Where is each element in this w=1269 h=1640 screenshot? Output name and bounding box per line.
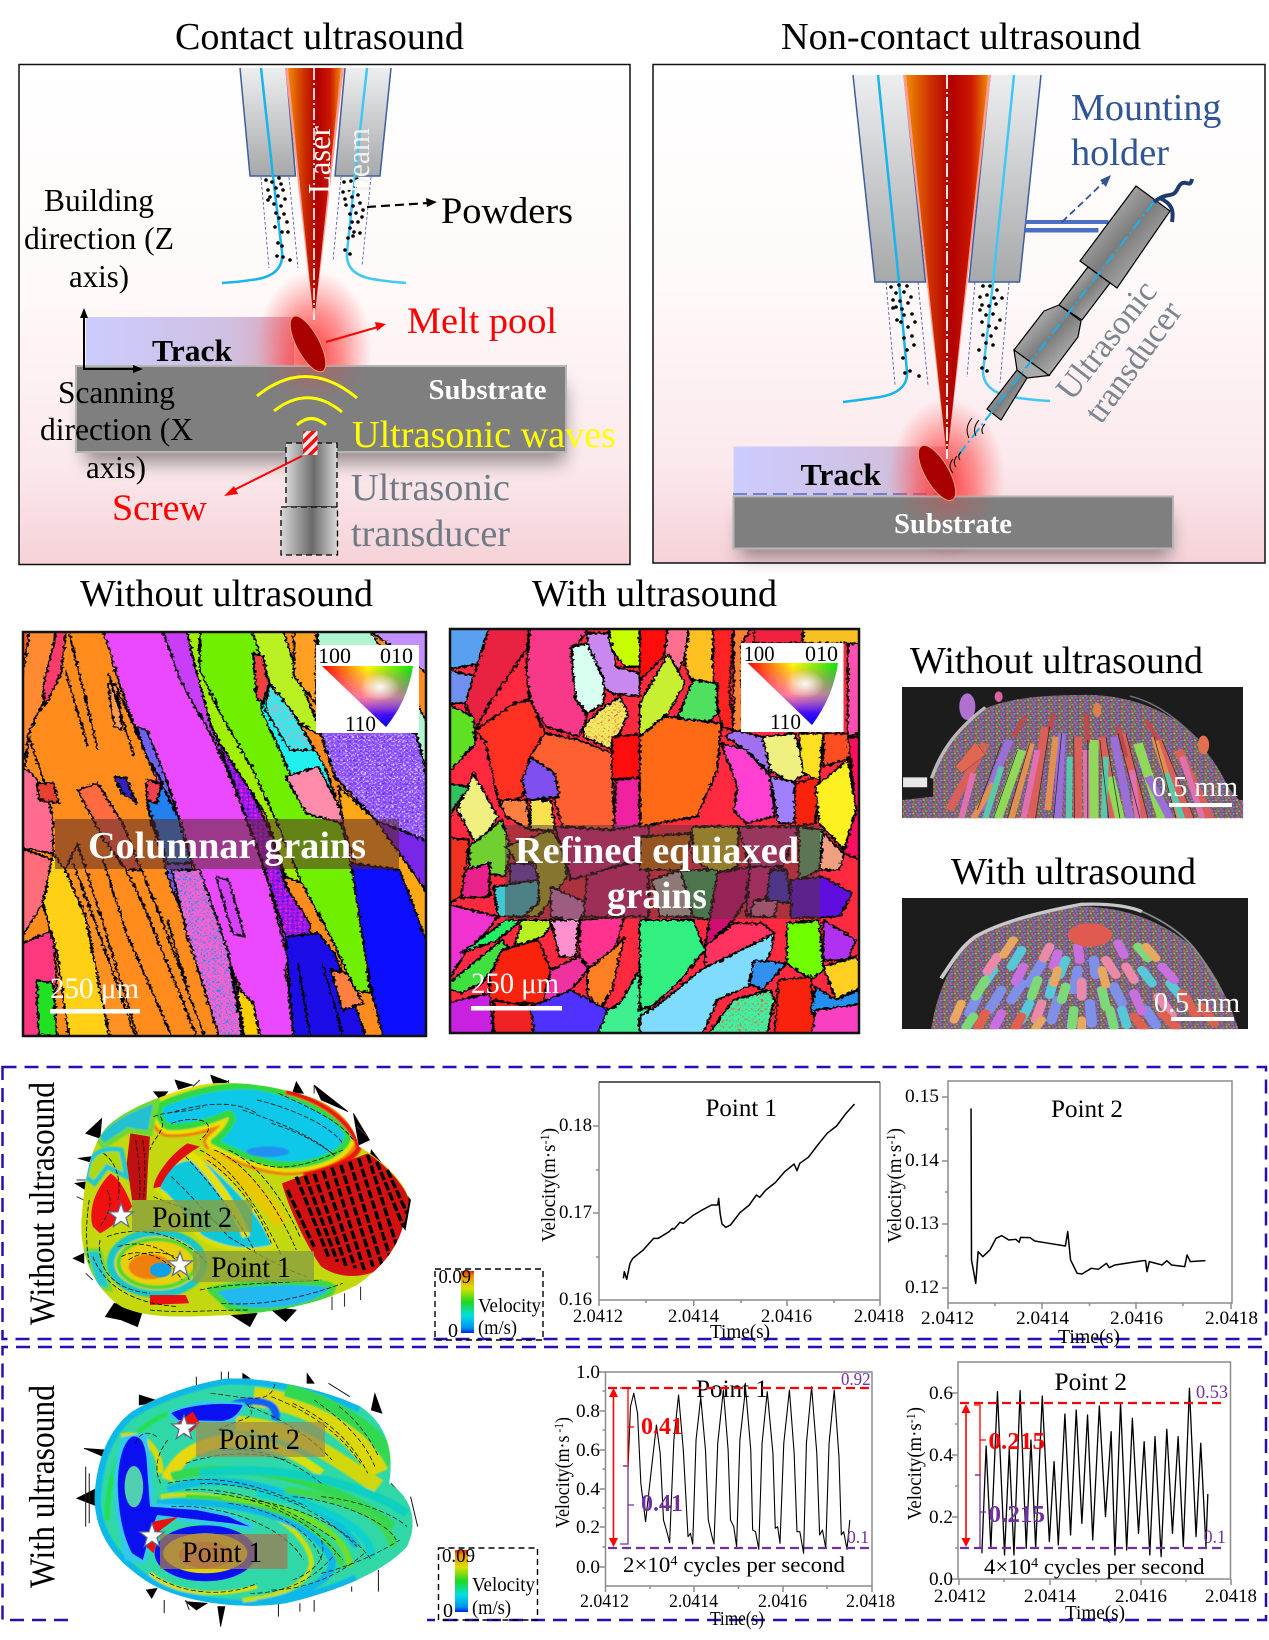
melt pool	[283, 311, 333, 377]
row label: Without ultrasound	[22, 1082, 62, 1325]
nozzle left	[853, 75, 926, 282]
melt pool	[911, 440, 963, 506]
point 1 label	[160, 1534, 288, 1569]
chart: point 1 velocity without ultrasound: 0.17	[559, 1202, 592, 1223]
panel: non-contact ultrasound schematic	[653, 64, 1265, 563]
ultrasonic transducer rotated label: transducer	[1078, 294, 1190, 430]
laser glow	[256, 270, 372, 426]
powders label and arrow: Powders	[441, 191, 573, 232]
heading: without ultrasound (EBSD): Without ultrasound	[80, 573, 373, 615]
building direction label: direction (Z	[24, 220, 174, 256]
velocity colour legend: (m/s)	[478, 1317, 517, 1339]
chart: point 2 velocity with ultrasound: -1	[903, 1413, 918, 1423]
ultrasonic transducer rotated label	[1049, 274, 1190, 430]
velocity colour legend: (m/s)	[472, 1597, 511, 1619]
star: point 1	[140, 1523, 164, 1547]
chart: point 1 velocity without ultrasound: )	[538, 1128, 560, 1134]
row label: With ultrasound	[22, 1385, 62, 1588]
inverse pole figure legend: 100	[318, 643, 351, 668]
chart: point 2 velocity with ultrasound: 2.0416	[1115, 1586, 1167, 1607]
inverse pole figure legend: 110	[345, 711, 376, 736]
chart: point 2 velocity without ultrasound: 0.14	[905, 1150, 940, 1171]
chart: point 1 velocity with ultrasound: 2×10	[623, 1552, 668, 1577]
track	[733, 446, 950, 500]
chart: point 1 velocity with ultrasound: 4	[670, 1554, 678, 1569]
chart: point 1 velocity with ultrasound: -1	[551, 1423, 566, 1436]
chart: point 2 velocity with ultrasound: 0.4	[929, 1445, 954, 1466]
ultrasonic transducer label	[351, 467, 510, 555]
mounting holder label and arrow: Mounting	[1071, 87, 1222, 129]
velocity colour legend: Velocity	[478, 1295, 541, 1317]
building direction label: axis)	[69, 258, 129, 294]
chart: point 1 velocity without ultrasound: 0.18	[559, 1115, 592, 1136]
chart: point 2 velocity without ultrasound: 2.0412	[921, 1308, 974, 1329]
chart: point 2 velocity without ultrasound: Time(s)	[1058, 1326, 1120, 1348]
substrate: Substrate	[428, 374, 547, 406]
velocity colour legend	[438, 1545, 538, 1622]
track label: Track	[800, 457, 882, 492]
ultrasonic waves arcs	[257, 376, 357, 425]
chart: point 2 velocity without ultrasound: )	[884, 1128, 906, 1134]
ultrasonic waves label: Ultrasonic waves	[352, 414, 616, 456]
chart: point 2 velocity without ultrasound: 2.0414	[1016, 1308, 1070, 1329]
chart: point 1 velocity with ultrasound: 0.4	[576, 1479, 601, 1500]
laser beam	[285, 68, 344, 325]
chart: point 2 velocity with ultrasound: 0.1	[1204, 1527, 1226, 1548]
chart: point 2 velocity with ultrasound: 0.215	[988, 1429, 1045, 1455]
scale bar: 0.5 mm	[1152, 771, 1238, 803]
velocity colour legend: 0.09	[442, 1545, 475, 1567]
ultrasonic transducer label: Ultrasonic	[351, 467, 510, 509]
point 2 label	[132, 1200, 252, 1234]
chart: point 2 velocity with ultrasound: 0.0	[929, 1569, 953, 1590]
track label: Track	[152, 333, 233, 368]
chart: point 1 velocity without ultrasound: 0.16	[559, 1289, 592, 1310]
point 2 label	[196, 1422, 325, 1457]
nozzle left	[240, 68, 296, 176]
star: point 2	[172, 1415, 196, 1439]
inverse pole figure legend	[316, 643, 419, 736]
chart: point 1 velocity with ultrasound: 1.0	[576, 1362, 600, 1383]
chart: point 1 velocity with ultrasound: 2.0418	[846, 1591, 895, 1612]
chart: point 2 velocity without ultrasound: -1	[883, 1134, 898, 1145]
cross-section micrograph with ultrasound	[902, 898, 1248, 1029]
panel: contact ultrasound schematic	[19, 64, 630, 564]
star: point 2	[109, 1203, 133, 1227]
laser beam label: beam	[340, 128, 376, 192]
chart: point 1 velocity with ultrasound: Point 1	[696, 1376, 768, 1403]
chart: point 2 velocity without ultrasound: Velocity(m·s	[884, 1140, 906, 1243]
chart: point 2 velocity with ultrasound: Point 2	[1054, 1369, 1127, 1396]
melt pool label and arrow: Melt pool	[407, 301, 557, 342]
track	[86, 317, 310, 370]
chart: point 1 velocity without ultrasound: 2.0418	[854, 1306, 904, 1327]
chart: point 2 velocity without ultrasound: 2.0416	[1110, 1308, 1163, 1329]
substrate: Substrate	[894, 508, 1012, 540]
grain label banner: Columnar grains	[88, 825, 366, 867]
chart: point 1 velocity without ultrasound: 2.0416	[761, 1306, 812, 1327]
point 1 label: Point 1	[182, 1536, 262, 1569]
velocity colour legend: 0.09	[438, 1266, 471, 1288]
velocity colour legend: 0	[448, 1320, 458, 1342]
laser beam label	[301, 126, 376, 194]
transducer assembly	[950, 179, 1192, 473]
axes arrows	[80, 308, 143, 373]
heading: with ultrasound (EBSD): With ultrasound	[532, 573, 777, 615]
grain label banner	[55, 819, 399, 869]
scanning direction label: Scanning	[58, 374, 175, 410]
transducer cylinders	[281, 443, 338, 555]
chart: point 1 velocity with ultrasound: 0.1	[847, 1527, 869, 1547]
chart: point 1 velocity with ultrasound: 0.6	[576, 1440, 600, 1461]
chart: point 2 velocity with ultrasound: cycles per second	[1038, 1554, 1204, 1579]
chart: point 1 velocity without ultrasound	[537, 1082, 904, 1343]
chart: point 2 velocity with ultrasound: 0.215	[988, 1502, 1045, 1528]
chart: point 1 velocity without ultrasound: Velocity(m·s	[538, 1139, 560, 1242]
map frame	[23, 632, 426, 1036]
chart: point 2 velocity with ultrasound: 2.0418	[1205, 1586, 1257, 1607]
chart: point 2 velocity without ultrasound: 0.15	[905, 1086, 939, 1107]
chart: point 2 velocity with ultrasound: 0.6	[929, 1383, 953, 1404]
chart: point 2 velocity without ultrasound	[883, 1081, 1258, 1348]
melt pool flow field	[71, 1075, 414, 1327]
chart: point 1 velocity without ultrasound: -1	[537, 1134, 552, 1145]
chart: point 1 velocity with ultrasound: 2.0412	[580, 1591, 629, 1612]
chart: point 1 velocity without ultrasound: 2.0412	[573, 1306, 623, 1327]
scale bar: 0.5 mm	[1154, 987, 1240, 1019]
title: non-contact ultrasound: Non-contact ultrasound	[781, 16, 1141, 58]
chart: point 2 velocity with ultrasound: 2.0414	[1024, 1586, 1076, 1607]
map frame	[450, 629, 859, 1033]
nozzle right	[335, 68, 391, 176]
chart: point 1 velocity with ultrasound: 2.0416	[758, 1591, 807, 1612]
grain label banner	[505, 825, 820, 919]
chart: point 1 velocity without ultrasound: Time(s)	[710, 1321, 770, 1343]
substrate	[734, 476, 1173, 557]
laser glow	[889, 398, 1005, 558]
laser beam	[903, 75, 991, 461]
velocity colour legend: Velocity	[472, 1574, 535, 1596]
point 2 label: Point 2	[152, 1201, 232, 1234]
star: point 1	[168, 1252, 192, 1276]
chart: point 2 velocity with ultrasound: 4	[1031, 1556, 1038, 1571]
ultrasonic transducer label: transducer	[351, 513, 510, 555]
mounting holder label and arrow	[1062, 87, 1222, 222]
inverse pole figure legend	[741, 641, 844, 734]
chart: point 2 velocity with ultrasound: 0.53	[1196, 1382, 1228, 1403]
EBSD map: refined equiaxed grains	[445, 625, 869, 1038]
ultrasonic transducer rotated label: Ultrasonic	[1049, 274, 1164, 407]
chart: point 1 velocity without ultrasound: 2.0414	[668, 1306, 719, 1327]
chart: point 1 velocity with ultrasound: 2.0414	[669, 1591, 718, 1612]
powders label and arrow	[367, 191, 573, 232]
screw	[303, 431, 318, 455]
chart: point 2 velocity with ultrasound	[903, 1362, 1257, 1624]
grain label banner: Refined equiaxed	[515, 830, 799, 872]
chart: point 1 velocity with ultrasound: )	[552, 1417, 574, 1423]
chart: point 2 velocity with ultrasound: 4×10	[984, 1554, 1029, 1579]
grain label banner: grains	[607, 875, 707, 917]
chart: point 1 velocity with ultrasound: 0.41	[641, 1491, 683, 1517]
chart: point 2 velocity with ultrasound: 2.0412	[934, 1586, 986, 1607]
chart: point 1 velocity with ultrasound: 0.92	[841, 1369, 871, 1389]
chart: point 2 velocity without ultrasound: Point 2	[1051, 1096, 1123, 1123]
building direction label: Building	[44, 182, 154, 218]
screw label and arrow: Screw	[112, 488, 207, 529]
substrate	[76, 344, 566, 463]
mounting holder bars	[1026, 220, 1108, 232]
chart: point 2 velocity with ultrasound: )	[904, 1407, 926, 1413]
melt pool label and arrow	[326, 301, 557, 342]
inverse pole figure legend: 010	[805, 641, 838, 666]
velocity colour legend	[435, 1266, 543, 1342]
chart: point 1 velocity with ultrasound: 0.41	[641, 1414, 683, 1440]
chart: point 2 velocity without ultrasound: 2.0418	[1205, 1308, 1258, 1329]
powder streams	[843, 75, 1050, 402]
title: contact ultrasound: Contact ultrasound	[175, 16, 464, 58]
panel: without ultrasound simulation	[2, 1067, 1266, 1348]
chart: point 1 velocity with ultrasound	[551, 1362, 895, 1630]
heading: without ultrasound (cross-section): Without ultrasound	[910, 640, 1203, 682]
chart: point 2 velocity with ultrasound: Time(s)	[1065, 1602, 1125, 1624]
building direction label	[24, 182, 174, 294]
chart: point 1 velocity with ultrasound: cycles per second	[678, 1552, 845, 1577]
chart: point 2 velocity with ultrasound: 0.2	[929, 1507, 953, 1528]
inverse pole figure legend: 110	[770, 709, 801, 734]
heading: with ultrasound (cross-section): With ultrasound	[951, 851, 1196, 893]
scale bar: 250 μm	[471, 967, 559, 1000]
nozzle right	[969, 75, 1041, 282]
powder streams	[222, 68, 406, 283]
inverse pole figure legend: 100	[744, 641, 775, 666]
scanning direction label	[40, 374, 193, 485]
cross-section micrograph without ultrasound	[902, 687, 1243, 818]
chart: point 1 velocity with ultrasound: 0.0	[576, 1557, 600, 1578]
chart: point 2 velocity without ultrasound: 0.13	[905, 1213, 939, 1234]
laser beam label: Laser	[301, 126, 337, 194]
EBSD map: columnar grains	[16, 627, 432, 1040]
inverse pole figure legend: 010	[380, 643, 413, 668]
chart: point 1 velocity with ultrasound: 0.8	[576, 1401, 600, 1422]
chart: point 1 velocity without ultrasound: Point 1	[706, 1095, 777, 1122]
melt pool flow field	[77, 1372, 428, 1627]
panel: with ultrasound simulation	[2, 1347, 1266, 1630]
velocity colour legend: 0	[443, 1600, 453, 1622]
screw label and arrow	[112, 456, 302, 529]
chart: point 1 velocity with ultrasound: 0.2	[576, 1517, 600, 1538]
point 1 label: Point 1	[211, 1251, 291, 1284]
mounting holder label and arrow: holder	[1071, 132, 1169, 174]
scanning direction label: direction (X	[40, 411, 193, 447]
scanning direction label: axis)	[86, 449, 146, 485]
chart: point 2 velocity with ultrasound: Velocity(m·s	[904, 1417, 926, 1520]
point 2 label: Point 2	[219, 1423, 300, 1456]
chart: point 1 velocity with ultrasound: Velocity(m·s	[552, 1425, 574, 1528]
chart: point 1 velocity with ultrasound: Time(s)	[710, 1608, 764, 1630]
chart: point 2 velocity without ultrasound: 0.12	[905, 1277, 939, 1298]
scale bar: 250 μm	[50, 972, 139, 1005]
